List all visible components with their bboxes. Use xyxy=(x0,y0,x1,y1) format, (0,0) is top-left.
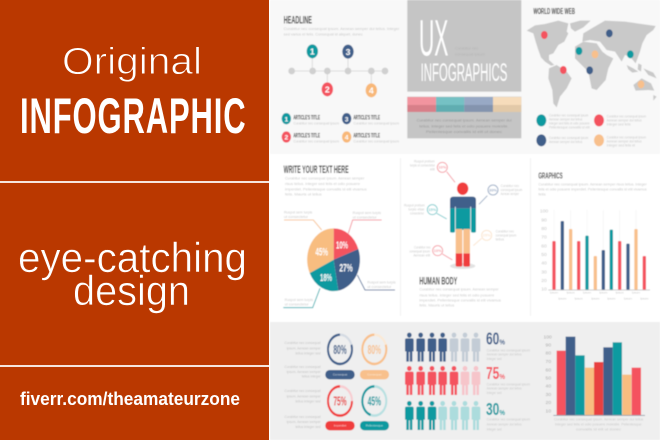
article legend: Curabitur nec consequat ipsum xyxy=(293,140,339,144)
panel: donut gauges: 75% xyxy=(333,393,347,408)
panel: human body: tellus xyxy=(496,237,504,241)
heading: Original: Original xyxy=(62,41,202,83)
row: navy people 60% xyxy=(405,329,530,362)
panel: grouped bar chart: convallis id elit ut donec xyxy=(576,428,621,432)
y axis labels: 60 xyxy=(546,367,551,373)
buttons xyxy=(325,370,389,430)
pie: 27% xyxy=(339,263,353,275)
row: teal people 30% xyxy=(405,399,530,431)
panel: human body: turpis ut consectetur xyxy=(410,163,436,167)
panel: human body: Curabitur nec xyxy=(414,245,431,249)
article legend: Curabitur nec consequat ipsum xyxy=(353,121,399,125)
x labels: Ipsum xyxy=(575,296,583,300)
x labels: Ipsum xyxy=(567,291,575,295)
pie: 10% xyxy=(336,240,348,251)
panel: UX infographics cover xyxy=(407,0,521,138)
axis labels: 90 xyxy=(541,217,547,223)
gauge captions: Curabitur nec consequat xyxy=(284,415,321,419)
panel: pie chart: ut consectetur xyxy=(285,303,310,307)
panel: UX infographics cover: tellus. Integer sed felis et odio posuere molestie. xyxy=(419,124,509,128)
donut: 80 navy xyxy=(325,331,355,368)
panel: human body: Aenean semper xyxy=(501,192,520,196)
row: red people 75%: 75 xyxy=(486,363,499,383)
article legend: ARTICLE'S TITLE xyxy=(353,115,380,121)
map legend: Pellentesque convallis id elit xyxy=(549,125,590,129)
row: teal people 30%: 30 xyxy=(486,399,499,419)
article legend: 1 xyxy=(284,116,288,123)
timeline: 4 xyxy=(369,86,374,96)
x labels: Ipsum xyxy=(632,291,641,295)
row: red people 75%: Aenean semper dui tellus xyxy=(487,387,522,391)
axis labels: 100 xyxy=(540,209,548,215)
timeline xyxy=(288,44,388,97)
panel: pie chart: Curabitur nec consequat ipsum. Aenean semper xyxy=(285,177,365,181)
gauge captions: tellus integer sed xyxy=(295,399,321,403)
buttons: Pellentesque xyxy=(366,424,383,428)
x labels: Ipsum xyxy=(583,291,592,295)
x labels: Ipsum xyxy=(599,291,608,295)
row: navy people 60%: Curabitur nec consequat ipsum xyxy=(487,348,530,352)
article legend: Curabitur nec consequat ipsum xyxy=(353,140,399,144)
row: teal people 30%: % xyxy=(499,408,505,417)
panel: human body: elit xyxy=(430,167,435,171)
bars xyxy=(557,337,641,415)
map legend: Curabitur nec consequat ipsum xyxy=(549,136,589,140)
timeline: 3 xyxy=(346,47,351,57)
y axis labels: 50 xyxy=(546,375,551,381)
gauge captions: tellus integer sed xyxy=(295,425,321,429)
y axis labels: 20 xyxy=(546,400,551,406)
article legend: ARTICLE'S TITLE xyxy=(293,134,320,140)
link: fiverr url: fiverr.com/theamateurzone xyxy=(20,389,240,409)
panel: pie chart: WRITE YOUR TEXT HERE xyxy=(284,164,349,176)
panel: donut gauges: 80% xyxy=(368,342,381,357)
map legend xyxy=(536,113,646,148)
gauge captions: ipsum. Aenean semper xyxy=(287,420,322,424)
y axis labels: 10 xyxy=(546,408,551,414)
article legend: 2 xyxy=(284,135,288,142)
pie leaders xyxy=(283,220,395,308)
buttons: Consequat xyxy=(333,373,347,377)
map legend: Integer sed felis et odio posuere xyxy=(549,122,590,126)
x labels: Ipsum xyxy=(550,291,559,295)
pie: 45% xyxy=(315,247,328,259)
y axis labels: 80 xyxy=(546,351,551,357)
panel: headline timeline xyxy=(282,15,400,144)
map legend: Integer sed felis et xyxy=(607,144,635,148)
y axis labels xyxy=(544,334,552,414)
row: navy people 60%: 60 xyxy=(486,329,499,349)
panel: graphics column chart: felis xyxy=(538,193,546,197)
panel: grouped bar chart: Curabitur nec consequat ipsum. Aenean semper dui tellus xyxy=(554,417,644,421)
pie xyxy=(307,228,360,291)
panel: pie chart: felis. Mauris ut tellus xyxy=(285,192,322,196)
panel: human body: 10% xyxy=(438,165,447,170)
article legend: 3 xyxy=(345,116,349,123)
panel: human body: consequat ipsum xyxy=(496,233,516,237)
panel: pie chart xyxy=(283,164,396,308)
panel: human body: turpis vitae xyxy=(408,207,424,211)
map legend: Aenean semper dui tellus xyxy=(549,118,583,122)
axis labels: 80 xyxy=(541,226,547,232)
article legend xyxy=(282,113,399,144)
axis labels: 70 xyxy=(541,235,547,241)
panel: UX infographics cover: Pellentesque convallis id elit ut donec xyxy=(426,130,502,134)
panel: human body: Curabitur nec xyxy=(501,184,519,188)
panel: human body: consequat ipsum xyxy=(501,188,523,192)
panel: UX infographics cover: UX xyxy=(419,9,448,66)
panel: human body: consectetur xyxy=(410,211,425,215)
panel: human body: consequat ipsum xyxy=(409,249,430,253)
panel: pie chart: Ruspot sem turpis xyxy=(284,211,313,215)
pie: 18% xyxy=(320,273,332,284)
panel: pie chart: ut consectetur xyxy=(284,215,309,219)
panel: infographic collage xyxy=(270,0,660,440)
panel: donut gauges: 80% xyxy=(333,342,347,357)
article legend: 4 xyxy=(345,135,349,142)
map legend: Curabitur nec consequat ipsum xyxy=(607,136,646,140)
panel: pie chart: risus tellus. Integer sed felis et odio posuere xyxy=(285,182,360,186)
panel: human body: felis. Mauris ut tellus xyxy=(419,304,455,308)
panel: UX infographics cover: Curabitur nec xyxy=(455,47,479,51)
heading: INFOGRAPHIC: INFOGRAPHIC xyxy=(20,87,246,144)
axis labels: 30 xyxy=(541,269,547,275)
panel: pie chart: imperdiet. Pellentesque convallis id elit vivamus xyxy=(285,187,367,191)
heading: design: design xyxy=(73,267,190,314)
panel: human body: risus tellus. Integer sed felis et odio posuere xyxy=(419,293,494,297)
panel: UX infographics cover: consequat ipsum xyxy=(455,52,485,56)
gauge captions: tellus integer sed xyxy=(295,351,321,355)
donut: 80 orange xyxy=(359,331,389,368)
panel: pie chart: Ruspot sem turpis xyxy=(285,298,313,302)
bars xyxy=(552,221,646,290)
panel: red promo sidebar xyxy=(0,0,269,440)
panel: grouped bar chart: Integer sed felis et odio posuere molestie. Pellentesque xyxy=(555,423,642,427)
panel: pie chart: Ruspot sem turpis xyxy=(353,211,381,215)
panel: world map xyxy=(527,7,657,148)
panel: headline timeline: Curabitur nec consequat ipsum. Aenean semper dui tellus. Integer xyxy=(284,27,400,31)
x labels: Ipsum xyxy=(616,291,624,295)
panel: pie chart: ut consectetur xyxy=(367,285,392,289)
article legend: ARTICLE'S TITLE xyxy=(293,115,320,121)
buttons: Consequat xyxy=(367,373,382,377)
axis labels: 60 xyxy=(541,243,547,249)
gauge captions: tellus integer xyxy=(302,375,322,379)
buttons: Imperdiet xyxy=(334,424,346,428)
map legend: Integer sed felis xyxy=(607,123,631,127)
callouts xyxy=(427,162,498,260)
panel: headline timeline: sed varius et felis. Consequat id aliquet, donec xyxy=(284,32,363,36)
x labels: Ipsum xyxy=(624,296,633,300)
timeline: 1 xyxy=(310,47,315,57)
gauge captions: ipsum. Aenean semper xyxy=(287,370,322,374)
map legend: Curabitur nec consequat ipsum xyxy=(549,113,589,117)
gauge captions: Curabitur nec consequat xyxy=(284,365,321,369)
axis labels xyxy=(540,209,548,293)
y axis labels: 30 xyxy=(546,392,551,398)
map legend: Aenean semper dui tellus xyxy=(607,119,642,123)
gauge captions: ipsum. Aenean semper xyxy=(287,346,322,350)
row: teal people 30%: Integer sed xyxy=(487,427,502,431)
panel: human body: Curabitur nec consequat ipsum. Aenean semper xyxy=(419,288,500,292)
panel: human body: imperdiet. Pellentesque convallis id elit vivamus xyxy=(419,299,501,303)
panel: donut gauges: 45% xyxy=(368,393,381,408)
axis labels: 40 xyxy=(541,261,547,267)
panel: headline timeline: HEADLINE xyxy=(284,15,312,27)
x labels xyxy=(550,291,649,300)
row: navy people 60%: Aenean semper dui tellus xyxy=(487,352,522,356)
panel: pictogram percentages xyxy=(405,329,530,431)
article legend: ARTICLE'S TITLE xyxy=(353,134,380,140)
article legend: Curabitur nec consequat ipsum xyxy=(293,121,339,125)
axis labels: 50 xyxy=(541,252,547,258)
panel: human body: Ruspot pretium xyxy=(404,204,425,208)
gauge captions: ipsum. Aenean semper xyxy=(287,394,322,398)
heading: eye-catching: eye-catching xyxy=(18,234,247,281)
row: red people 75%: Integer sed xyxy=(487,391,502,395)
y axis labels: 90 xyxy=(546,343,551,349)
row: teal people 30%: Curabitur nec consequat ipsum xyxy=(487,418,530,422)
row: teal people 30%: Aenean semper dui tellus xyxy=(487,423,522,427)
row: navy people 60%: % xyxy=(499,338,505,347)
x labels: Ipsum xyxy=(591,296,600,300)
map legend: Curabitur nec consequat ipsum xyxy=(607,115,646,119)
x labels: Ipsum xyxy=(558,296,567,300)
y axis labels: 70 xyxy=(546,359,551,365)
gauge captions: Curabitur nec consequat xyxy=(284,389,321,393)
y axis labels: 100 xyxy=(544,334,552,340)
map legend: Aenean semper dui tellus xyxy=(549,140,583,144)
map continents xyxy=(527,21,657,107)
figure xyxy=(450,182,476,269)
map pins xyxy=(541,29,644,88)
panel: UX infographics cover: INFOGRAPHICS xyxy=(421,59,507,87)
panel: human body: 30% xyxy=(489,187,497,192)
y axis labels: 40 xyxy=(546,384,551,390)
panel: human body: Ruspot pretium xyxy=(414,159,435,163)
row: navy people 60%: Integer sed xyxy=(487,357,502,361)
timeline: 2 xyxy=(325,85,330,95)
panel: donut gauges xyxy=(284,331,389,430)
axis labels: 20 xyxy=(541,278,547,284)
panel: human body: 15% xyxy=(428,207,437,212)
x labels: Ipsum xyxy=(607,296,616,300)
panel: human body: Curabitur nec xyxy=(496,229,514,233)
gauge captions: Curabitur nec consequat xyxy=(284,341,321,345)
panel: human body: 25% xyxy=(483,233,491,238)
panel: graphics column chart: felis et odio posuere imperdiet. Pellentesque convallis id elit vivamus xyxy=(538,188,647,192)
panel: pie chart: Ruspot sem turpis xyxy=(367,281,396,285)
axis labels: 10 xyxy=(541,287,547,293)
x labels: Ipsum xyxy=(640,296,649,300)
row: red people 75%: % xyxy=(499,372,505,381)
donut: 45 teal xyxy=(359,383,389,419)
gauge captions xyxy=(284,341,322,429)
donut: 75 red xyxy=(328,386,352,416)
panel: graphics column chart xyxy=(538,171,650,300)
panel: human body: Aenean elit xyxy=(413,253,430,257)
heading: graphics: GRAPHICS xyxy=(538,171,563,181)
heading: human body: HUMAN BODY xyxy=(419,276,458,288)
colour band xyxy=(407,97,521,138)
map legend: Aenean semper dui tellus xyxy=(607,140,642,144)
panel: pie chart: ut consectetur xyxy=(353,215,378,219)
row: red people 75%: Curabitur nec consequat ipsum xyxy=(487,382,530,386)
panel: human body xyxy=(404,159,523,308)
row: red people 75% xyxy=(405,363,530,395)
panel: human body: 10% xyxy=(434,248,442,253)
heading: world wide web: WORLD WIDE WEB xyxy=(533,7,575,16)
panel: grouped bar chart xyxy=(544,334,645,432)
panel: UX infographics cover: Curabitur nec consequat ipsum. Aenean semper dui xyxy=(417,118,512,122)
panel: graphics column chart: Curabitur nec consequat ipsum. Aenean semper risus tellus. Integer xyxy=(538,182,648,186)
